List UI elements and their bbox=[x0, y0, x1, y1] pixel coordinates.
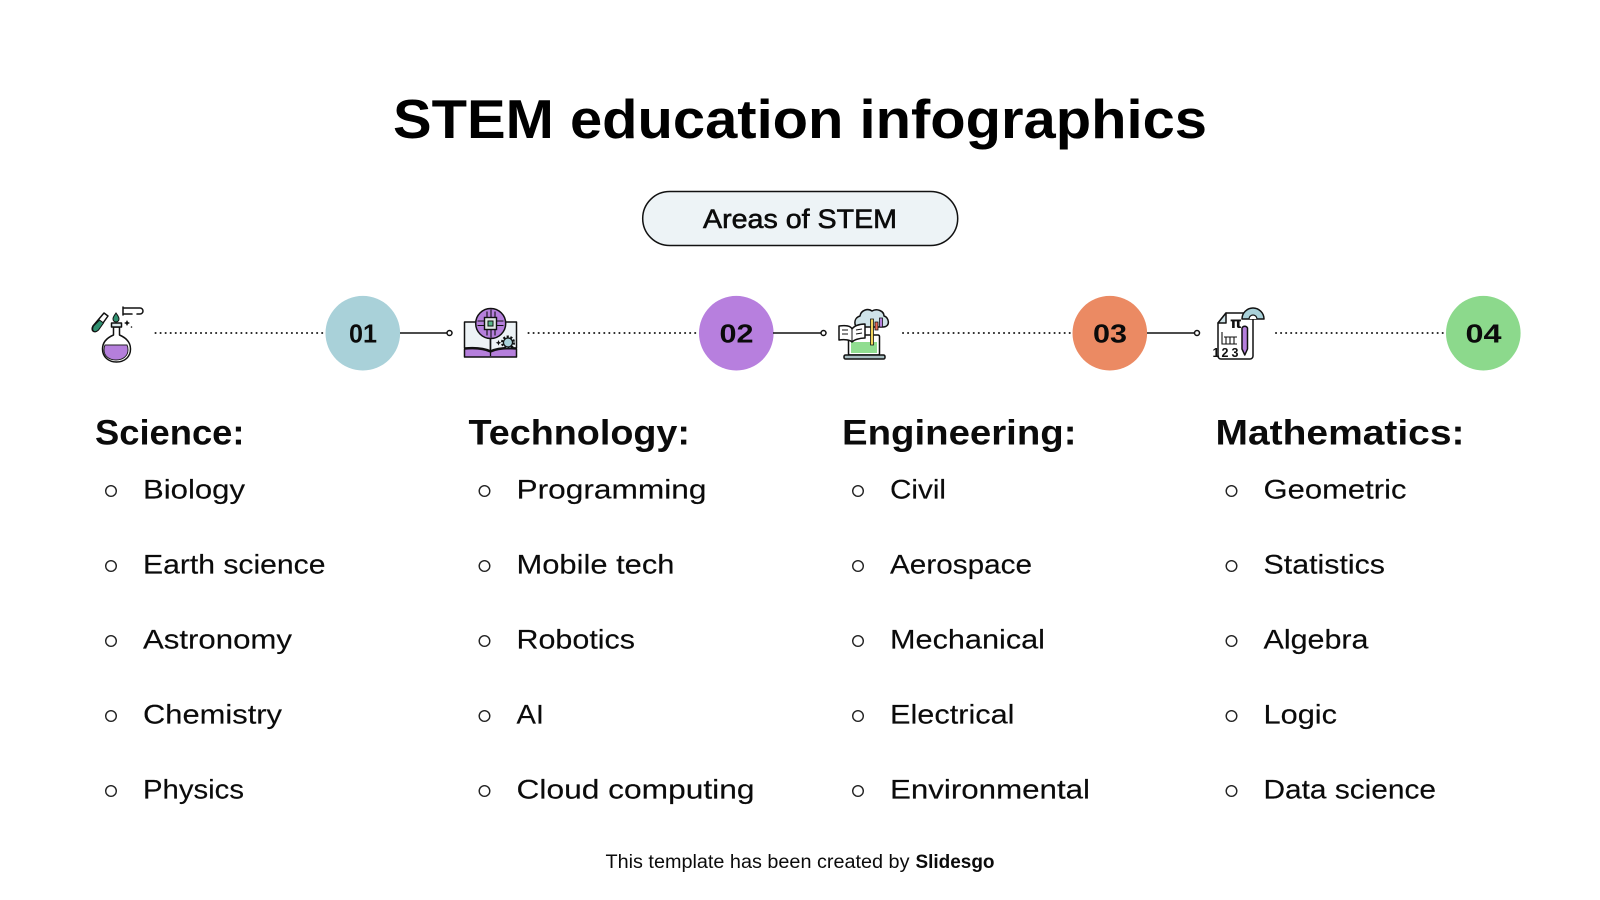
column: Technology: Cloud computing bbox=[516, 774, 754, 804]
column: Technology: Mobile tech bbox=[516, 549, 674, 579]
column: Mathematics: Statistics bbox=[1264, 549, 1385, 579]
column: Mathematics: Logic bbox=[1264, 699, 1337, 729]
timeline step 03: 03 bbox=[1093, 318, 1127, 348]
title: STEM education infographics bbox=[393, 88, 1207, 150]
icon: mathematics sheet: 3 bbox=[1232, 346, 1238, 360]
column: Science: Astronomy bbox=[143, 624, 293, 654]
column: Engineering bbox=[842, 414, 1090, 804]
column: Science: Biology bbox=[143, 474, 246, 504]
timeline step 01: 01 bbox=[349, 318, 377, 348]
column: Engineering: Civil bbox=[890, 474, 946, 504]
icon: mathematics sheet: 2 bbox=[1222, 346, 1228, 360]
column: Engineering: Mechanical bbox=[890, 624, 1045, 654]
icon: mathematics sheet: π bbox=[1230, 314, 1242, 332]
column: Science: Physics bbox=[143, 774, 244, 804]
timeline step 04: 04 bbox=[1466, 318, 1502, 348]
heading: Mathematics: Mathematics: bbox=[1216, 414, 1464, 452]
column: Technology: Programming bbox=[516, 474, 706, 504]
footer credit: This template has been created by bbox=[606, 852, 910, 873]
column: Mathematics: Geometric bbox=[1264, 474, 1406, 504]
heading: Technology: Technology: bbox=[468, 414, 690, 452]
heading: Engineering: Engineering: bbox=[842, 414, 1076, 452]
column: Technology: AI bbox=[516, 699, 544, 729]
column: Engineering: Electrical bbox=[890, 699, 1014, 729]
icon: mathematics sheet: 1 bbox=[1212, 346, 1220, 360]
column: Engineering: Aerospace bbox=[890, 549, 1032, 579]
column: Mathematics bbox=[1216, 414, 1464, 804]
timeline step 04 bbox=[1276, 296, 1521, 371]
footer credit: Slidesgo bbox=[916, 852, 994, 873]
timeline step 03 bbox=[903, 296, 1200, 371]
timeline step 01 bbox=[156, 296, 452, 371]
timeline step 02 bbox=[528, 296, 826, 371]
icon: mathematics sheet bbox=[1212, 308, 1264, 360]
column: Technology bbox=[468, 414, 754, 804]
pill label: Areas of STEM bbox=[643, 192, 958, 246]
column: Science: Chemistry bbox=[143, 699, 283, 729]
timeline step 02: 02 bbox=[720, 318, 754, 348]
icon: technology book with chip bbox=[464, 308, 516, 357]
column: Mathematics: Data science bbox=[1264, 774, 1436, 804]
column: Mathematics: Algebra bbox=[1264, 624, 1370, 654]
column: Technology: Robotics bbox=[516, 624, 635, 654]
heading: Science: Science: bbox=[95, 414, 244, 452]
column: Science bbox=[95, 414, 326, 804]
column: Engineering: Environmental bbox=[890, 774, 1090, 804]
icon: science flask bbox=[92, 307, 143, 362]
pill label: Areas of STEM: Areas of STEM bbox=[703, 204, 897, 234]
icon: engineering laptop and cloud bbox=[839, 310, 888, 359]
column: Science: Earth science bbox=[143, 549, 326, 579]
